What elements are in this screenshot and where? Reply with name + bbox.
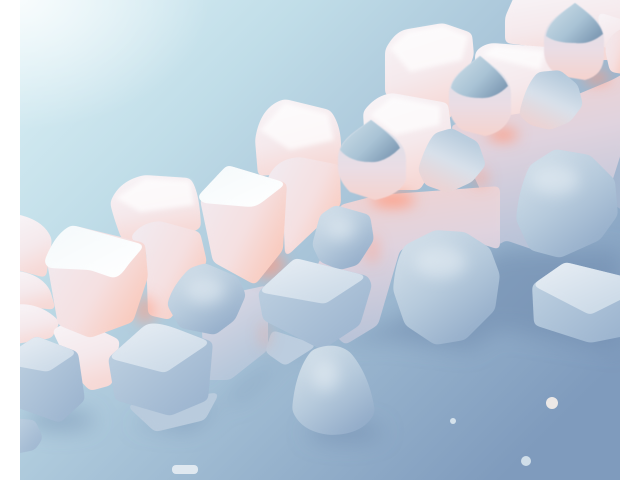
main wall left section <box>300 186 500 345</box>
blue dome front <box>292 345 375 435</box>
large blue cube left <box>108 323 213 416</box>
large blob right <box>516 149 618 258</box>
main wall right section <box>450 70 630 252</box>
lower plinths <box>126 330 318 432</box>
round block 1 <box>418 128 486 193</box>
right edge dark block <box>610 108 630 215</box>
top caps of back blocks <box>116 26 545 212</box>
floor shadows <box>25 250 620 442</box>
pink lower block <box>52 318 120 391</box>
large blob front <box>393 230 500 345</box>
back row blocks <box>10 0 630 345</box>
large blue cube centre <box>258 258 372 350</box>
round block 2 <box>519 70 583 130</box>
pointed dome 2 <box>449 56 511 136</box>
small debris pieces <box>172 397 558 474</box>
right edge pink sliver <box>605 25 630 75</box>
hex blue block <box>167 263 246 335</box>
cube: large white left <box>44 225 148 338</box>
pointed dome 3 <box>544 3 604 80</box>
mid lower block <box>200 285 268 380</box>
blob highlights <box>185 165 579 391</box>
pointed dome 1 <box>338 120 406 200</box>
cube: large white centre <box>197 165 287 285</box>
small blue cube on wall <box>312 205 374 270</box>
coral glows <box>134 73 610 349</box>
right cube lower <box>532 262 630 343</box>
small blue cube left <box>10 336 85 423</box>
bottom left stub <box>10 418 43 455</box>
